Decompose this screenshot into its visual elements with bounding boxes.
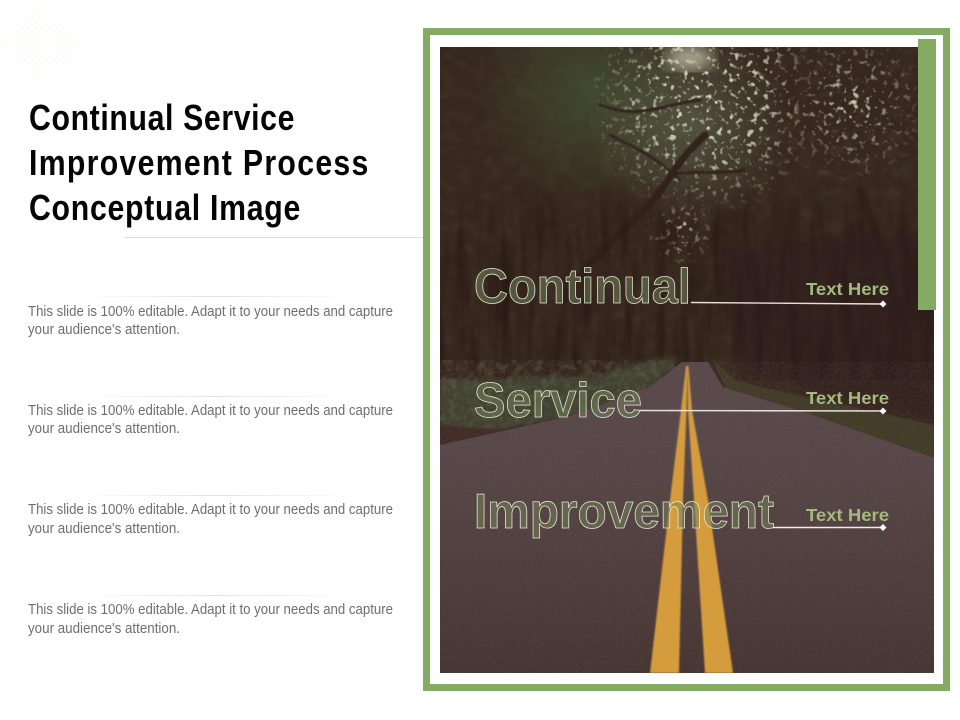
text block 3: This slide is 100% editable. Adapt it to your needs and capture xyxy=(28,502,393,518)
label: Service: Service xyxy=(474,374,642,428)
right verge xyxy=(712,358,934,460)
title: Conceptual Image xyxy=(29,189,300,229)
text block 2 xyxy=(28,396,393,437)
text block 3 xyxy=(28,495,393,537)
text block 1 xyxy=(28,296,393,338)
road xyxy=(440,362,934,673)
text block 4: This slide is 100% editable. Adapt it to your needs and capture xyxy=(28,602,393,618)
text block 4 xyxy=(28,595,393,637)
text block 2: your audience's attention. xyxy=(28,421,180,437)
text block 1: your audience's attention. xyxy=(28,322,180,338)
text block 1: This slide is 100% editable. Adapt it to your needs and capture xyxy=(28,304,393,320)
title: Continual Service xyxy=(29,99,294,139)
text block 4: your audience's attention. xyxy=(28,621,180,637)
label: Continual: Text Here xyxy=(806,279,889,299)
text block 2: This slide is 100% editable. Adapt it to your needs and capture xyxy=(28,403,393,419)
decorative dotted diamond xyxy=(0,0,85,86)
reddish roadside band xyxy=(440,424,532,444)
label: Continual: Continual xyxy=(474,260,691,314)
label: Service xyxy=(474,374,889,428)
dark tree bands xyxy=(728,236,928,387)
label: Improvement: Improvement xyxy=(474,485,774,539)
title xyxy=(29,99,368,229)
label: Service: Text Here xyxy=(806,388,889,408)
text block 3: your audience's attention. xyxy=(28,521,180,537)
green frame xyxy=(426,32,946,688)
photo: forest road xyxy=(440,46,934,673)
title: Improvement Process xyxy=(29,144,368,184)
left verge bushes xyxy=(440,357,678,430)
branches xyxy=(576,98,876,282)
label: Improvement: Text Here xyxy=(806,505,889,525)
label: Continual xyxy=(474,260,889,314)
yellow road lines xyxy=(650,366,733,673)
green accent bar xyxy=(918,39,936,310)
